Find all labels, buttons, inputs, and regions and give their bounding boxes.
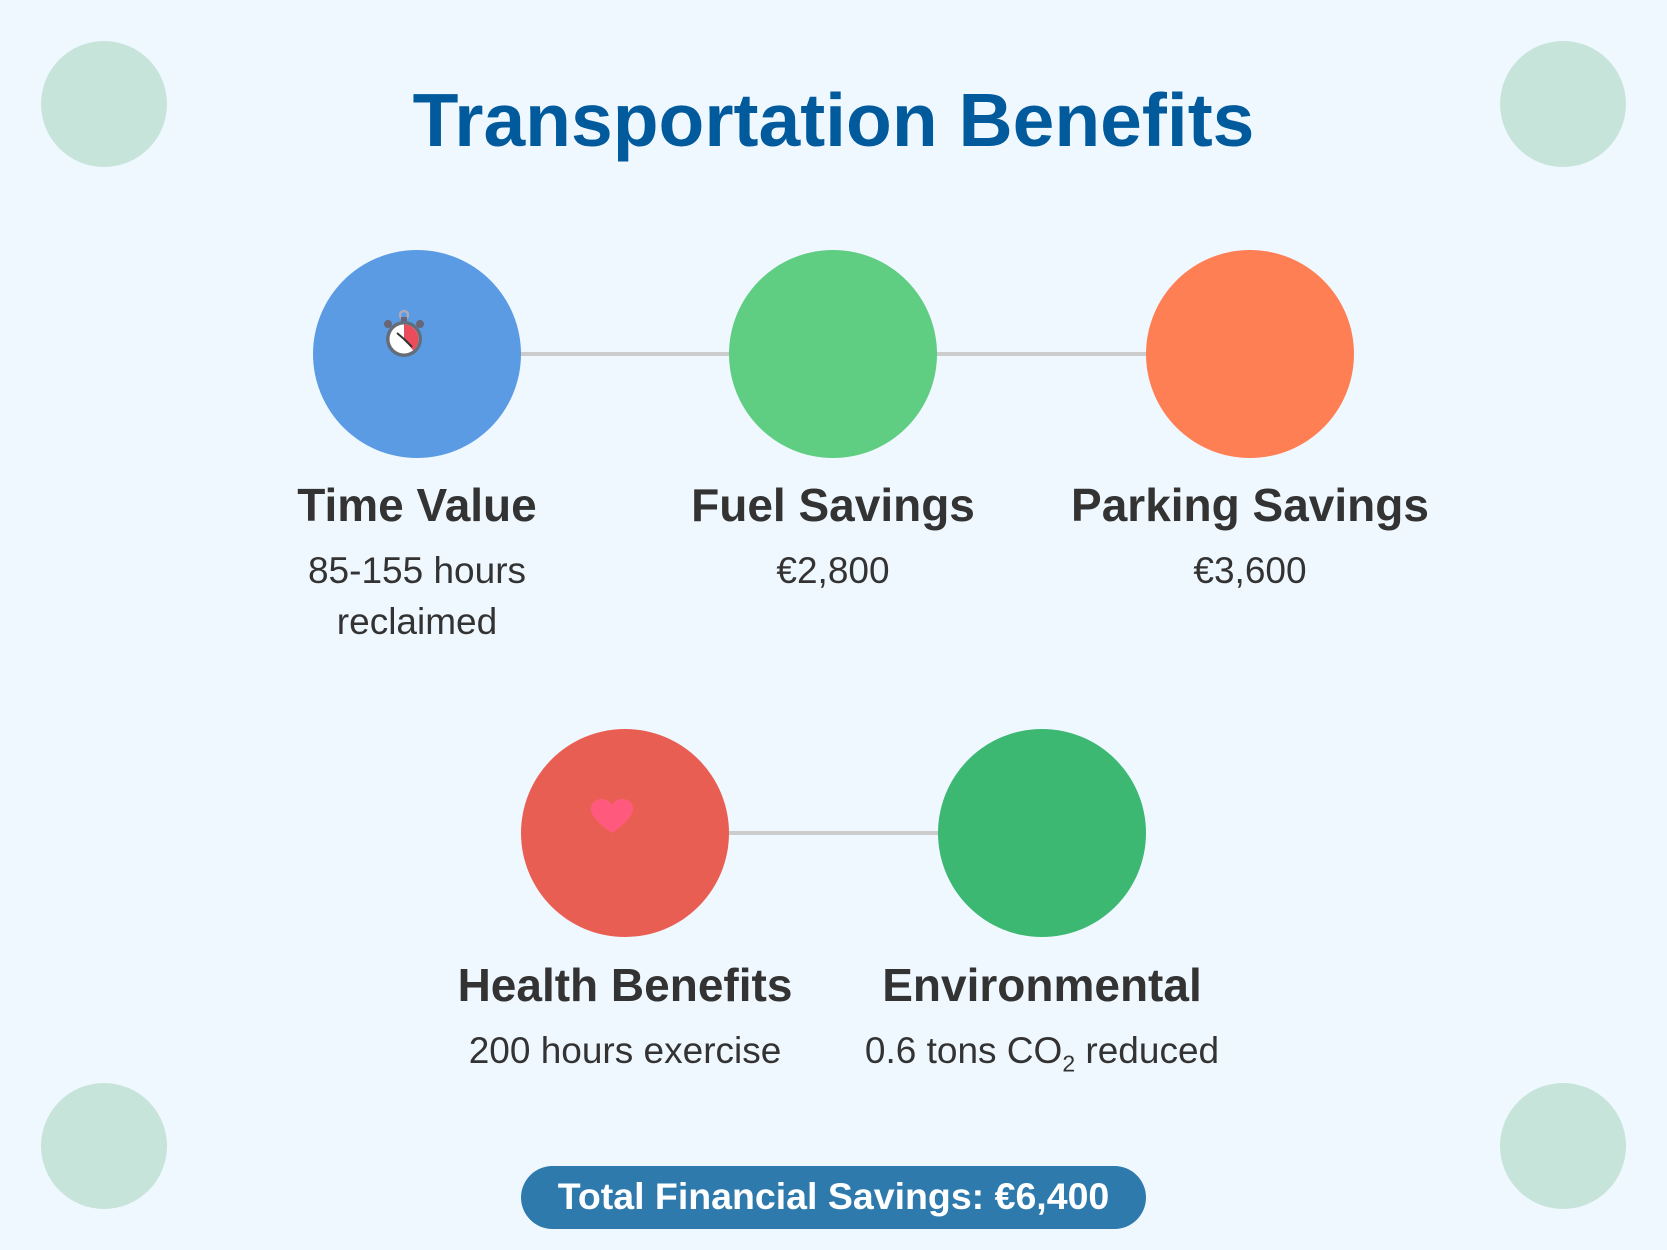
total savings pill bbox=[521, 1166, 1146, 1229]
node: environmental circle bbox=[938, 729, 1146, 937]
node: health circle bbox=[521, 729, 729, 937]
label: parking savings bbox=[1071, 479, 1429, 591]
label: environmental: 0.6 tons CO2 reduced bbox=[865, 1030, 1219, 1076]
node: fuel savings circle bbox=[729, 250, 937, 458]
label: fuel savings bbox=[691, 479, 975, 591]
label: health benefits: 200 hours exercise bbox=[469, 1030, 781, 1071]
label: health benefits bbox=[458, 959, 792, 1071]
label: parking savings: Parking Savings bbox=[1071, 479, 1429, 531]
label: time value bbox=[297, 479, 537, 642]
label: parking savings: €3,600 bbox=[1193, 550, 1307, 591]
label: fuel savings: €2,800 bbox=[776, 550, 890, 591]
label: environmental: Environmental bbox=[882, 959, 1202, 1011]
label: environmental bbox=[865, 959, 1219, 1076]
label: health benefits: Health Benefits bbox=[458, 959, 792, 1011]
title: Transportation Benefits bbox=[413, 78, 1254, 162]
node: parking savings circle bbox=[1146, 250, 1354, 458]
label: time value: 85-155 hours bbox=[308, 550, 526, 591]
node: time value circle bbox=[313, 250, 521, 458]
label: time value: reclaimed bbox=[337, 601, 497, 642]
label: fuel savings: Fuel Savings bbox=[691, 479, 975, 531]
label: time value: Time Value bbox=[297, 479, 537, 531]
icon: stopwatch bbox=[384, 311, 424, 357]
total savings pill: Total Financial Savings: €6,400 bbox=[558, 1175, 1109, 1217]
icon: heart bbox=[591, 799, 633, 833]
